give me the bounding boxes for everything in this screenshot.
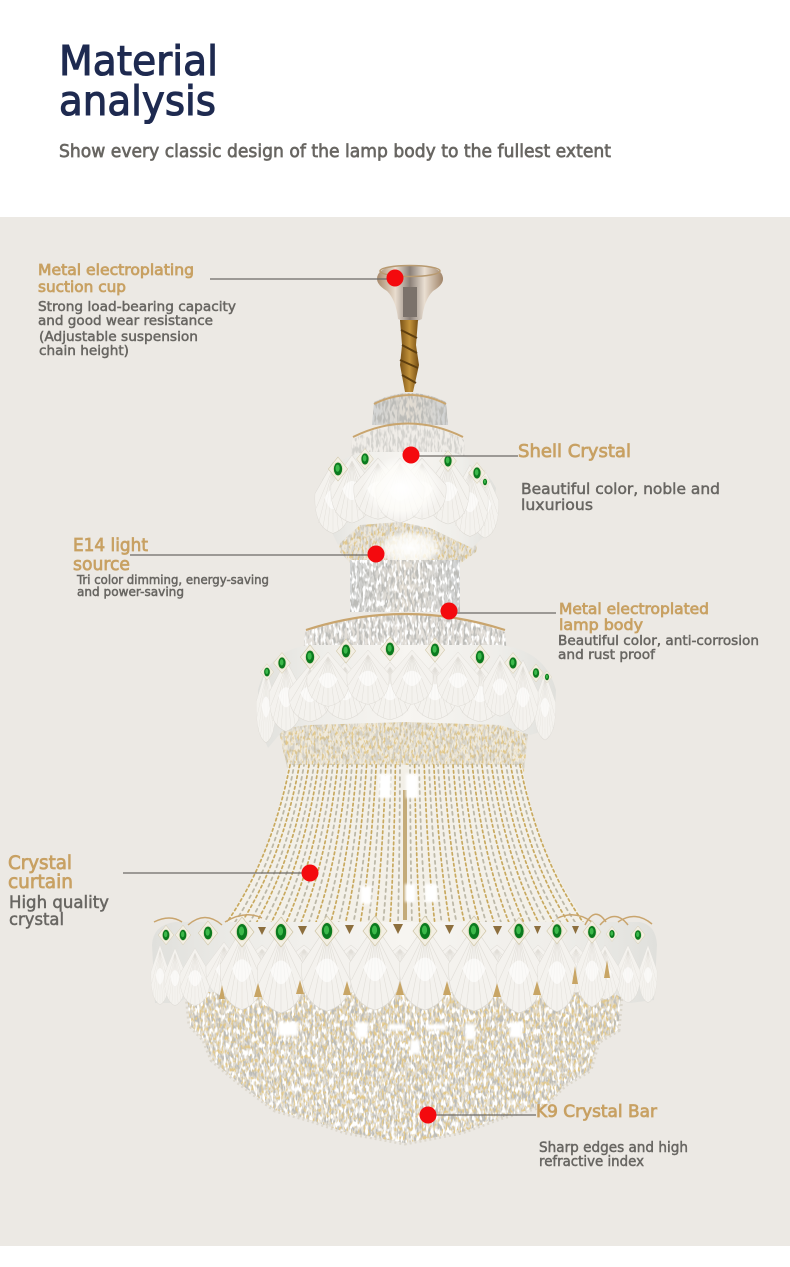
callout: E14 light source: E14 light <box>73 535 148 556</box>
callout: K9 crystal bar: K9 Crystal Bar <box>536 1102 657 1121</box>
callout: crystal curtain: Crystal <box>8 853 72 874</box>
callout: metal electroplated lamp body: lamp body <box>559 616 643 634</box>
callout: K9 crystal bar <box>420 1102 688 1170</box>
callout: K9 crystal bar: refractive index <box>539 1154 644 1170</box>
callout: metal electroplated lamp body: and rust proof <box>558 647 656 663</box>
callout: shell crystal: Shell Crystal <box>518 441 631 462</box>
callout: crystal curtain: crystal <box>9 910 64 929</box>
lower fringe of upper shell tier <box>336 515 482 566</box>
title: analysis <box>59 77 216 125</box>
callout: metal electroplating suction cup: Strong load-bearing capacity <box>38 299 236 315</box>
callout: metal electroplating suction cup: Metal electroplating <box>38 261 194 279</box>
callout: E14 light source <box>73 535 384 599</box>
callout: shell crystal: luxurious <box>521 496 593 514</box>
second crystal tier <box>350 424 466 480</box>
main band emeralds <box>158 916 645 947</box>
upper shell band <box>315 452 499 548</box>
crystal cylinder <box>350 560 460 612</box>
crystal curtain <box>220 765 592 930</box>
callout: shell crystal: Beautiful color, noble and <box>521 480 720 498</box>
middle shell band <box>256 645 556 748</box>
callout: E14 light source: and power-saving <box>77 585 184 599</box>
callout: metal electroplated lamp body: Beautiful color, anti-corrosion <box>558 633 759 649</box>
callout: metal electroplating suction cup <box>38 261 404 359</box>
upper tier emeralds <box>328 448 490 488</box>
main shell band <box>151 922 657 1013</box>
callout: metal electroplating suction cup: (Adjustable suspension <box>39 329 198 345</box>
title <box>59 37 218 125</box>
callout: K9 crystal bar: Sharp edges and high <box>539 1140 688 1156</box>
callout: metal electroplating suction cup: suction cup <box>38 278 126 296</box>
small gold triangles between main band gems <box>258 924 579 935</box>
ceiling suction cup <box>377 265 443 322</box>
bottom crystal bowl <box>186 985 622 1143</box>
callout: crystal curtain: curtain <box>8 872 73 893</box>
gold ring tier <box>302 614 508 668</box>
top crystal tier <box>372 393 448 425</box>
callout: metal electroplating suction cup: chain height) <box>39 343 129 359</box>
main band top hooks <box>154 914 652 925</box>
callout: metal electroplating suction cup: and good wear resistance <box>38 313 213 329</box>
callout: shell crystal <box>402 441 720 514</box>
callout: E14 light source: Tri color dimming, energy-saving <box>76 573 269 587</box>
callout: E14 light source: source <box>73 554 130 575</box>
callout: metal electroplated lamp body <box>440 600 759 663</box>
gold fringe at top of curtain <box>275 715 530 772</box>
gold bead tips between the scallops <box>219 960 610 999</box>
callout: crystal curtain: High quality <box>9 893 109 912</box>
subtitle: Show every classic design of the lamp body to the fullest extent <box>59 142 611 162</box>
chandelier illustration <box>151 265 657 1143</box>
hanging chain <box>400 320 419 392</box>
title: Material <box>59 37 218 85</box>
middle tier emeralds <box>260 637 552 683</box>
callout: crystal curtain <box>8 853 318 929</box>
callout: metal electroplated lamp body: Metal electroplated <box>559 600 709 618</box>
